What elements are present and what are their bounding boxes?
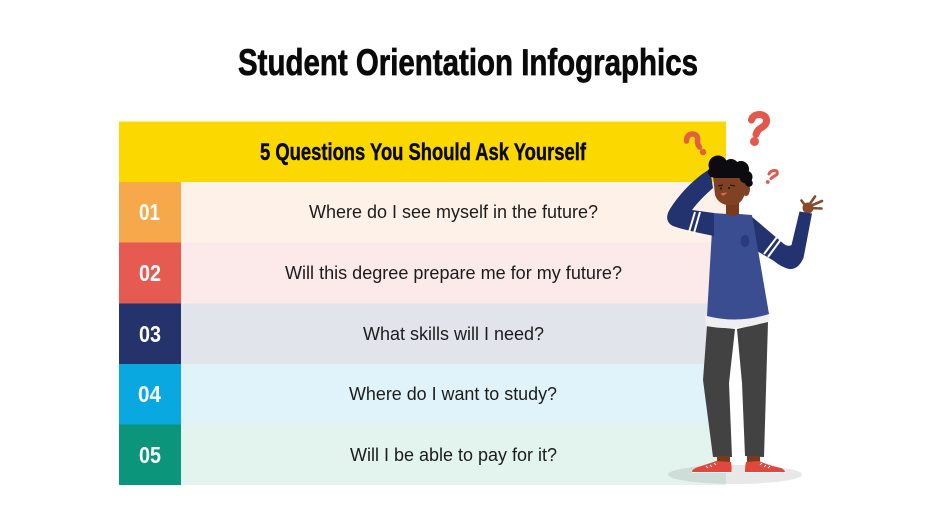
- row 01: 01: [139, 199, 160, 225]
- table header: 5 Questions You Should Ask Yourself: [260, 139, 587, 166]
- row 05: Will I be able to pay for it?: [350, 444, 557, 465]
- hair: [708, 156, 753, 187]
- icon: small question mark: [766, 170, 777, 184]
- row 04: Where do I want to study?: [349, 383, 557, 404]
- head: [708, 156, 753, 205]
- row 01: Where do I see myself in the future?: [309, 201, 598, 222]
- icon: medium question mark: [686, 134, 706, 155]
- icon: large question mark: [750, 114, 767, 146]
- ground shadow: [668, 465, 802, 484]
- row 02: Will this degree prepare me for my future?: [285, 262, 622, 283]
- pocket badge: [740, 235, 750, 247]
- row 02: [119, 242, 726, 304]
- row 04: [119, 364, 726, 424]
- row 01: [119, 182, 726, 242]
- left arm raised to head: [667, 169, 714, 236]
- row 03: 03: [139, 321, 161, 347]
- row 02: 02: [139, 260, 161, 286]
- panel: question table: [119, 122, 726, 485]
- row 05: [119, 424, 726, 485]
- ankles: [717, 456, 760, 464]
- trousers: [703, 322, 768, 457]
- right arm and hand: [751, 196, 822, 269]
- illustration: student: [667, 156, 822, 484]
- shirt hem: [705, 313, 770, 328]
- neck: [726, 198, 739, 218]
- row 05: 05: [139, 442, 161, 468]
- shoes: [692, 461, 785, 472]
- table header: [119, 122, 726, 182]
- row 03: [119, 304, 726, 364]
- face details: [718, 185, 735, 186]
- title: Student Orientation Infographics: [238, 42, 698, 83]
- row 04: 04: [138, 381, 161, 407]
- torso: [707, 213, 769, 320]
- row 03: What skills will I need?: [363, 323, 544, 344]
